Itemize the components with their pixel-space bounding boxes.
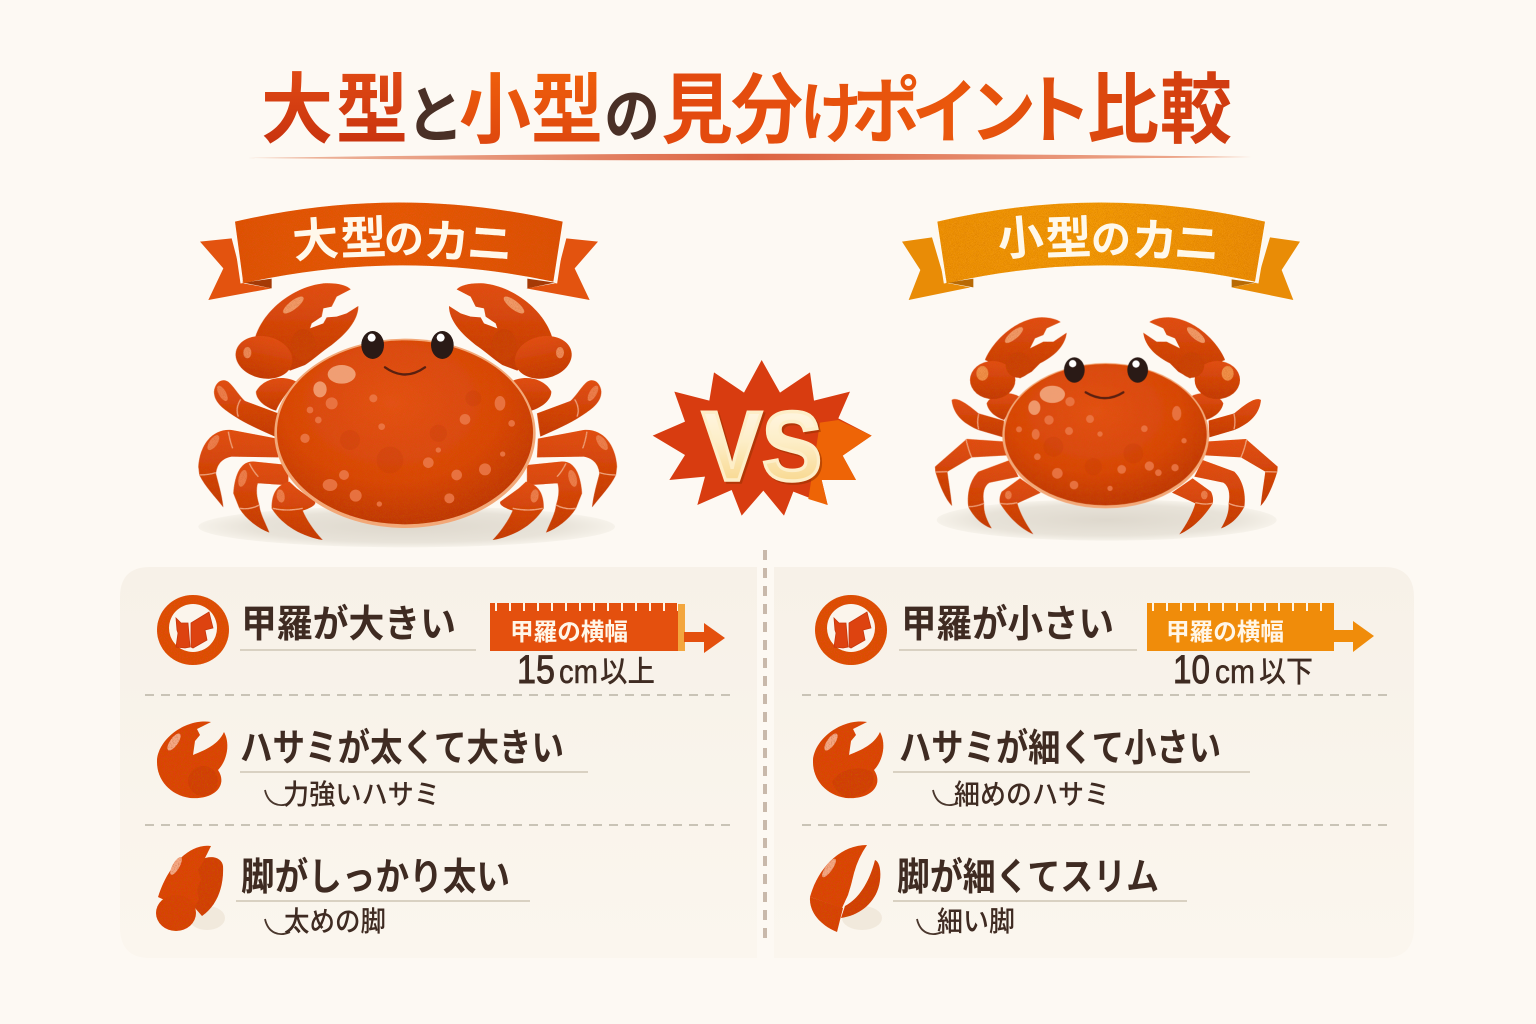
- heading: 脚が細くてスリム: [897, 857, 1159, 899]
- title: の: [604, 84, 660, 150]
- icon: small claw: [813, 722, 883, 798]
- panel background: [774, 567, 1414, 958]
- banner: small crab: [902, 202, 1300, 300]
- banner label: large crab: カ: [423, 215, 470, 269]
- heading: ハサミが細くて小さい: [899, 728, 1221, 770]
- size value: [1173, 648, 1313, 692]
- icon: big claw: [157, 722, 227, 798]
- banner: large crab: [200, 202, 598, 300]
- banner label: large crab: 型: [340, 211, 387, 265]
- banner label: large crab: の: [384, 218, 424, 262]
- panel: large crab traits: [120, 567, 757, 958]
- heading: 甲羅が小さい: [901, 604, 1114, 646]
- VS lettering: VS: [702, 391, 822, 501]
- title: 較: [1160, 68, 1232, 153]
- icon: shell: [157, 595, 229, 665]
- VS starburst badge: [653, 360, 872, 516]
- size value: 以上: [600, 656, 655, 689]
- title: ト: [1022, 70, 1092, 153]
- title underline: [248, 154, 1252, 160]
- title: 比: [1087, 68, 1159, 153]
- bar label: 甲羅の横幅: [1166, 619, 1284, 646]
- panel background: [120, 567, 757, 958]
- illustration: small crab: [935, 317, 1278, 541]
- icon: shell: [815, 595, 887, 665]
- trait row: shell size: [815, 595, 1374, 692]
- title: け: [800, 77, 862, 151]
- title: と: [406, 81, 464, 150]
- banner label: small crab: ニ: [1172, 216, 1222, 271]
- title: 型: [531, 68, 603, 153]
- title: ン: [970, 74, 1036, 152]
- measure bar arrow: [1147, 603, 1374, 652]
- title: 見: [661, 68, 733, 153]
- banner label: large crab: 大: [290, 212, 341, 268]
- title: イ: [912, 74, 978, 152]
- heading: 脚がしっかり太い: [241, 857, 510, 899]
- trait row: claws: [813, 722, 1250, 810]
- bar label: 甲羅の横幅: [510, 619, 628, 646]
- title: 分: [731, 68, 803, 153]
- size value: 15: [517, 648, 555, 692]
- size value: cm: [1215, 653, 1255, 690]
- banner label: small crab: カ: [1131, 214, 1178, 268]
- icon: slim leg: [810, 845, 882, 932]
- trait row: legs: [810, 845, 1187, 937]
- banner label: small crab: の: [1091, 218, 1131, 262]
- panel: small crab traits: [774, 567, 1414, 958]
- title: 小: [459, 68, 531, 153]
- sub note: 細い脚: [937, 906, 1015, 937]
- illustration: large crab: [198, 283, 617, 547]
- banner label: small crab: 型: [1045, 211, 1092, 265]
- size value: [517, 648, 655, 692]
- heading: 甲羅が大きい: [241, 604, 456, 646]
- size value: 10: [1173, 648, 1210, 692]
- title: 型: [336, 68, 408, 153]
- sub note: 細めのハサミ: [954, 779, 1110, 810]
- banner label: large crab: ニ: [465, 216, 515, 271]
- title: ポ: [852, 71, 920, 152]
- icon: thick leg: [156, 846, 225, 931]
- size value: 以下: [1259, 656, 1313, 689]
- sub note: 太めの脚: [284, 906, 386, 937]
- sub note: 力強いハサミ: [283, 779, 440, 810]
- trait row: shell size: [157, 595, 725, 692]
- banner label: small crab: 小: [995, 210, 1046, 266]
- title: 大: [261, 68, 333, 153]
- size value: cm: [559, 653, 598, 690]
- trait row: legs: [156, 846, 530, 937]
- trait row: claws: [157, 722, 588, 810]
- measure bar arrow: [490, 603, 725, 653]
- starburst: [653, 360, 872, 516]
- heading: ハサミが太くて大きい: [240, 728, 564, 770]
